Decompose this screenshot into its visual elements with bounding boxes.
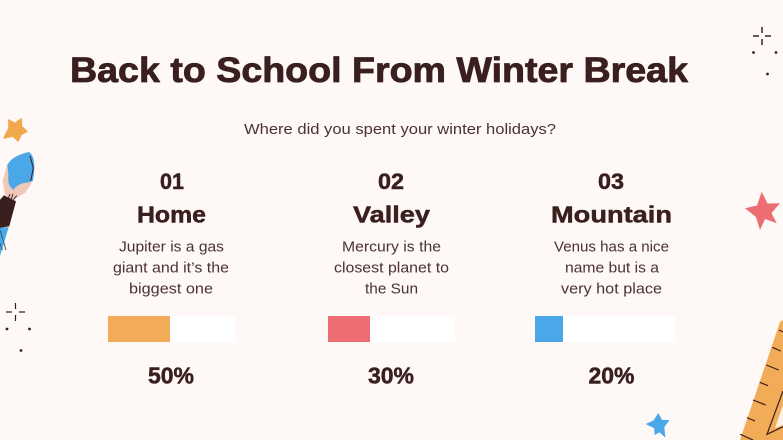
- heading: Home: Home: [137, 202, 206, 228]
- icon: paintbrush: [0, 152, 34, 256]
- value 20%: 20%: [588, 362, 634, 388]
- value 50%: 50%: [148, 362, 194, 388]
- icon: ruler: [740, 320, 783, 440]
- heading: Valley: Valley: [353, 202, 430, 228]
- description: Mountain: very hot place: [561, 280, 662, 298]
- description: Home: Jupiter is a gas: [119, 238, 224, 256]
- number 01: 01: [160, 169, 184, 194]
- icon: sparkle top right: [752, 27, 777, 75]
- description: Mountain: name but is a: [565, 260, 660, 276]
- title: Back to School From Winter Break: [70, 51, 689, 90]
- description: Mountain: Venus has a nice: [554, 238, 669, 256]
- value 30%: 30%: [368, 362, 414, 388]
- icon: sparkle left: [6, 303, 31, 352]
- description: Home: biggest one: [129, 280, 213, 298]
- icon: orange star: [4, 119, 27, 141]
- description: Valley: Mercury is the: [342, 238, 441, 256]
- description: Valley: [334, 238, 449, 298]
- number 02: 02: [378, 169, 404, 194]
- subtitle: Where did you spent your winter holidays?: [244, 121, 556, 138]
- description: Valley: the Sun: [365, 280, 418, 298]
- panel: column 01 Home: [108, 169, 235, 388]
- progress bar 50%: [108, 316, 235, 342]
- icon: blue star: [646, 414, 669, 437]
- heading: Mountain: Mountain: [551, 202, 672, 228]
- panel: column 02 Valley: [328, 169, 455, 388]
- progress bar 30%: [328, 316, 455, 342]
- description: Mountain: [554, 238, 669, 298]
- description: Valley: closest planet to: [334, 260, 449, 276]
- description: Home: [113, 238, 229, 298]
- description: Home: giant and it’s the: [113, 260, 229, 276]
- icon: red star: [745, 192, 780, 230]
- number 03: 03: [598, 169, 624, 194]
- progress bar 20%: [535, 316, 675, 342]
- panel: column 03 Mountain: [535, 169, 675, 388]
